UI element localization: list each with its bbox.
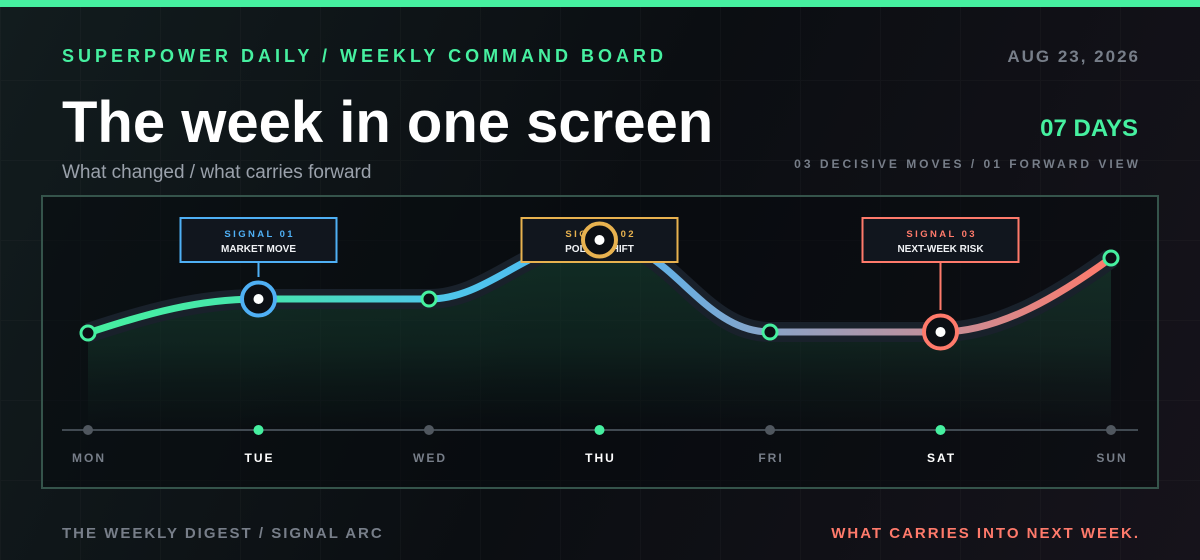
title: The week in one screen: [62, 90, 713, 155]
callout: signal 02: POLICY SHIFT: [565, 244, 634, 255]
callout: signal 02: SIGNAL 02: [565, 229, 636, 240]
area under the arc: [88, 240, 1111, 430]
callout: signal 01: MARKET MOVE: [221, 244, 296, 255]
top accent bar: [0, 0, 1200, 7]
callout: signal 03: NEXT-WEEK RISK: [897, 244, 984, 255]
callout: signal 02: [522, 218, 678, 262]
callout: signal 01: [180, 218, 336, 277]
node: Friday: [763, 325, 777, 339]
node: Wednesday: [422, 292, 436, 306]
marker: Saturday signal: [924, 316, 957, 348]
panel: signal arc chart: [42, 196, 1158, 488]
node: Sunday: [1104, 251, 1118, 265]
footer left label: THE WEEKLY DIGEST / SIGNAL ARC: [62, 525, 384, 542]
callout: signal 01: SIGNAL 01: [224, 229, 295, 240]
date: AUG 23, 2026: [1007, 47, 1140, 66]
callout: signal 03: [862, 218, 1018, 310]
subtitle: What changed / what carries forward: [62, 162, 371, 183]
arc halo: [88, 240, 1111, 333]
day labels: SUN: [1096, 451, 1128, 465]
days count: 07 DAYS: [1040, 115, 1138, 142]
day labels: SAT: [927, 451, 956, 465]
marker: Tuesday signal: [242, 282, 275, 316]
callout: signal 03: SIGNAL 03: [906, 229, 977, 240]
node: Monday: [81, 326, 95, 340]
marker: Thursday signal: [583, 224, 616, 256]
day labels: WED: [413, 451, 447, 465]
signal arc line: [88, 240, 1111, 333]
eyebrow heading: SUPERPOWER DAILY / WEEKLY COMMAND BOARD: [62, 46, 667, 66]
day labels: MON: [72, 451, 106, 465]
day labels: FRI: [758, 451, 784, 465]
day labels: TUE: [244, 451, 274, 465]
day labels: THU: [585, 451, 616, 465]
summary line: 03 DECISIVE MOVES / 01 FORWARD VIEW: [794, 157, 1141, 171]
timeline axis: [62, 425, 1138, 435]
day labels: [72, 451, 1128, 465]
footer right callout: WHAT CARRIES INTO NEXT WEEK.: [831, 525, 1140, 542]
panel frame: [42, 196, 1158, 488]
